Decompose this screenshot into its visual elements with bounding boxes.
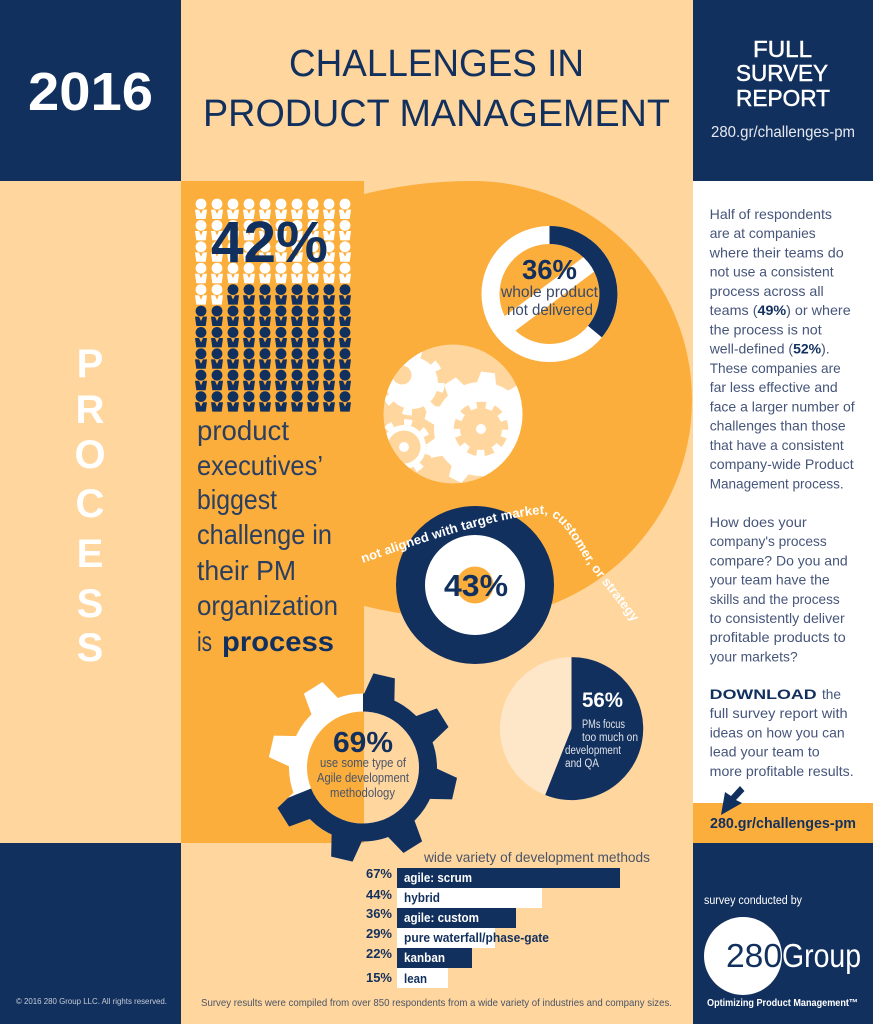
donut chart: 43% not aligned: [410, 520, 540, 650]
text: product executives' biggest challenge: organization: [197, 590, 338, 621]
panel: year header block: [0, 0, 181, 181]
pie chart: 56%: development: [565, 745, 622, 757]
full survey report heading: FULL: [753, 36, 812, 62]
text block: right column: skills and the process: [710, 591, 840, 607]
text block: right column: How does your: [710, 514, 807, 530]
pie chart: 56%: PMs focus: [582, 719, 625, 731]
text block: right column: face a larger number of: [710, 398, 855, 414]
logo: 280 Group: Optimizing Product Management™: [707, 998, 858, 1009]
panel: survey report header block: [693, 0, 873, 181]
large orange circle: [364, 181, 692, 614]
text: product executives' biggest challenge: is: [197, 626, 212, 657]
survey conducted by: survey conducted by: [704, 895, 802, 907]
donut chart: 43% not aligned: 43%: [444, 568, 508, 603]
footnote: survey base: Survey results were compiled from over 850 respondents from a wide variety of industries and company sizes.: [201, 997, 672, 1009]
logo: 280 Group: [704, 917, 861, 1009]
panel: orange column: [181, 181, 364, 843]
bar chart: development methods: agile: custom: [404, 910, 479, 925]
donut chart: 36% whole product not delivered: not delivered: [507, 302, 593, 319]
text block: right column: full survey report with: [710, 705, 848, 721]
bar chart: development methods: 29%: [366, 926, 392, 941]
pie chart: 56%: too much on: [582, 732, 638, 744]
text block: right column: company-wide Product: [710, 456, 854, 472]
text block: right column: to consistently deliver: [710, 610, 845, 626]
text block: right column: where their teams do: [709, 244, 844, 260]
pie chart: 56%: [500, 657, 643, 800]
section label: process: S: [77, 626, 103, 670]
year: 2016: [28, 62, 153, 122]
text: product executives' biggest challenge: [197, 415, 338, 657]
copyright: © 2016 280 Group LLC. All rights reserved.: [16, 996, 167, 1006]
text block: right column: not use a consistent: [710, 264, 834, 280]
icon: gears in circle: [384, 344, 522, 484]
section label: process: S: [77, 582, 103, 626]
stat: 42%: 42%: [211, 210, 328, 275]
text block: right column: DOWNLOAD: [710, 686, 817, 702]
panel: right text column: [693, 181, 873, 803]
text block: right column: challenges than those: [710, 418, 846, 434]
panel: logo block: [693, 843, 873, 1024]
donut chart: 36% whole product not delivered: whole product: [500, 284, 599, 301]
panel: link strip: [693, 803, 873, 843]
text block: right column: [709, 206, 855, 779]
text: product executives' biggest challenge: biggest: [197, 484, 277, 515]
panel: bottom left block: [0, 843, 181, 1024]
bar chart: development methods: lean: [404, 971, 427, 986]
gear chart: 69% agile: methodology: [330, 786, 396, 800]
full survey report heading: REPORT: [736, 85, 830, 111]
text: product executives' biggest challenge: process: [222, 626, 334, 657]
section label: process: O: [74, 433, 106, 477]
donut chart: 36% whole product not delivered: 36%: [522, 254, 577, 285]
bar chart: development methods: hybrid: [404, 890, 440, 905]
gear chart: 69% agile: [268, 672, 458, 863]
text block: right column: process across all: [710, 283, 824, 299]
text: product executives' biggest challenge: challenge in: [197, 519, 332, 550]
section label: process: [74, 342, 106, 670]
logo: 280 Group: 280: [726, 937, 782, 974]
full survey report heading: SURVEY: [736, 60, 828, 86]
text block: right column: Management process.: [710, 475, 844, 491]
bar chart: development methods: kanban: [404, 950, 445, 965]
bar chart: development methods: [366, 849, 650, 988]
curved caption: not aligned with target market, customer, or strategy: not aligned with target market, customer, or strategy: [361, 506, 638, 620]
bar chart: development methods: 44%: [366, 887, 392, 902]
bar chart: development methods: agile: scrum: [404, 870, 472, 885]
pie chart: 56%: and QA: [565, 758, 599, 770]
text block: right column: These companies are: [710, 360, 841, 376]
text block: right column: your markets?: [710, 648, 798, 664]
text block: right column: the process is not: [710, 321, 822, 337]
logo: 280 Group: Group: [782, 937, 861, 974]
donut chart: 36% whole product not delivered: [480, 235, 620, 353]
bar chart: development methods: wide variety of development methods: [423, 849, 650, 865]
text block: right column: profitable products to: [710, 629, 846, 645]
text block: right column: far less effective and: [710, 379, 838, 395]
title: [203, 43, 670, 135]
gear chart: 69% agile: use some type of: [320, 756, 406, 770]
section label: process: E: [77, 532, 103, 576]
bar chart: development methods: 67%: [366, 866, 392, 881]
bar chart: development methods: 22%: [366, 946, 392, 961]
title: PRODUCT MANAGEMENT: [203, 93, 670, 135]
text block: right column: are at companies: [710, 225, 816, 241]
arrow: points to link: [721, 786, 744, 815]
text: product executives' biggest challenge: product: [197, 415, 289, 446]
text block: right column: that have a consistent: [710, 437, 844, 453]
title: CHALLENGES IN: [289, 43, 584, 85]
section label: process: R: [76, 388, 105, 432]
bar chart: development methods: 15%: [366, 970, 392, 985]
text block: right column: company's process: [710, 533, 827, 549]
text: product executives' biggest challenge: their PM: [197, 555, 296, 586]
text block: right column: compare? Do you and: [710, 552, 848, 568]
download link: 280.gr/challenges-pm: [710, 815, 856, 832]
bar chart: development methods: pure waterfall/phase-gate: [404, 930, 549, 945]
gear chart: 69% agile: 69%: [333, 727, 393, 759]
pictogram: 100 people, 42 white: [195, 199, 351, 412]
text block: right column: the: [822, 686, 841, 702]
gear chart: 69% agile: Agile development: [317, 771, 409, 785]
text block: right column: ideas on how you can: [710, 724, 845, 740]
text: product executives' biggest challenge: executives’: [197, 450, 323, 481]
text block: right column: well-defined (52%).: [709, 341, 830, 357]
text block: right column: lead your team to: [710, 744, 820, 760]
report link: 280.gr/challenges-pm: [711, 124, 855, 141]
bar chart: development methods: 36%: [366, 906, 392, 921]
section label: process: C: [76, 482, 104, 526]
text block: right column: your team have the: [710, 572, 830, 588]
full survey report heading: [736, 36, 830, 111]
pie chart: 56%: 56%: [582, 689, 623, 712]
text block: right column: Half of respondents: [710, 206, 832, 222]
section label: process: P: [77, 342, 103, 386]
text block: right column: more profitable results.: [710, 763, 854, 779]
text block: right column: teams (49%) or where: [710, 302, 851, 318]
